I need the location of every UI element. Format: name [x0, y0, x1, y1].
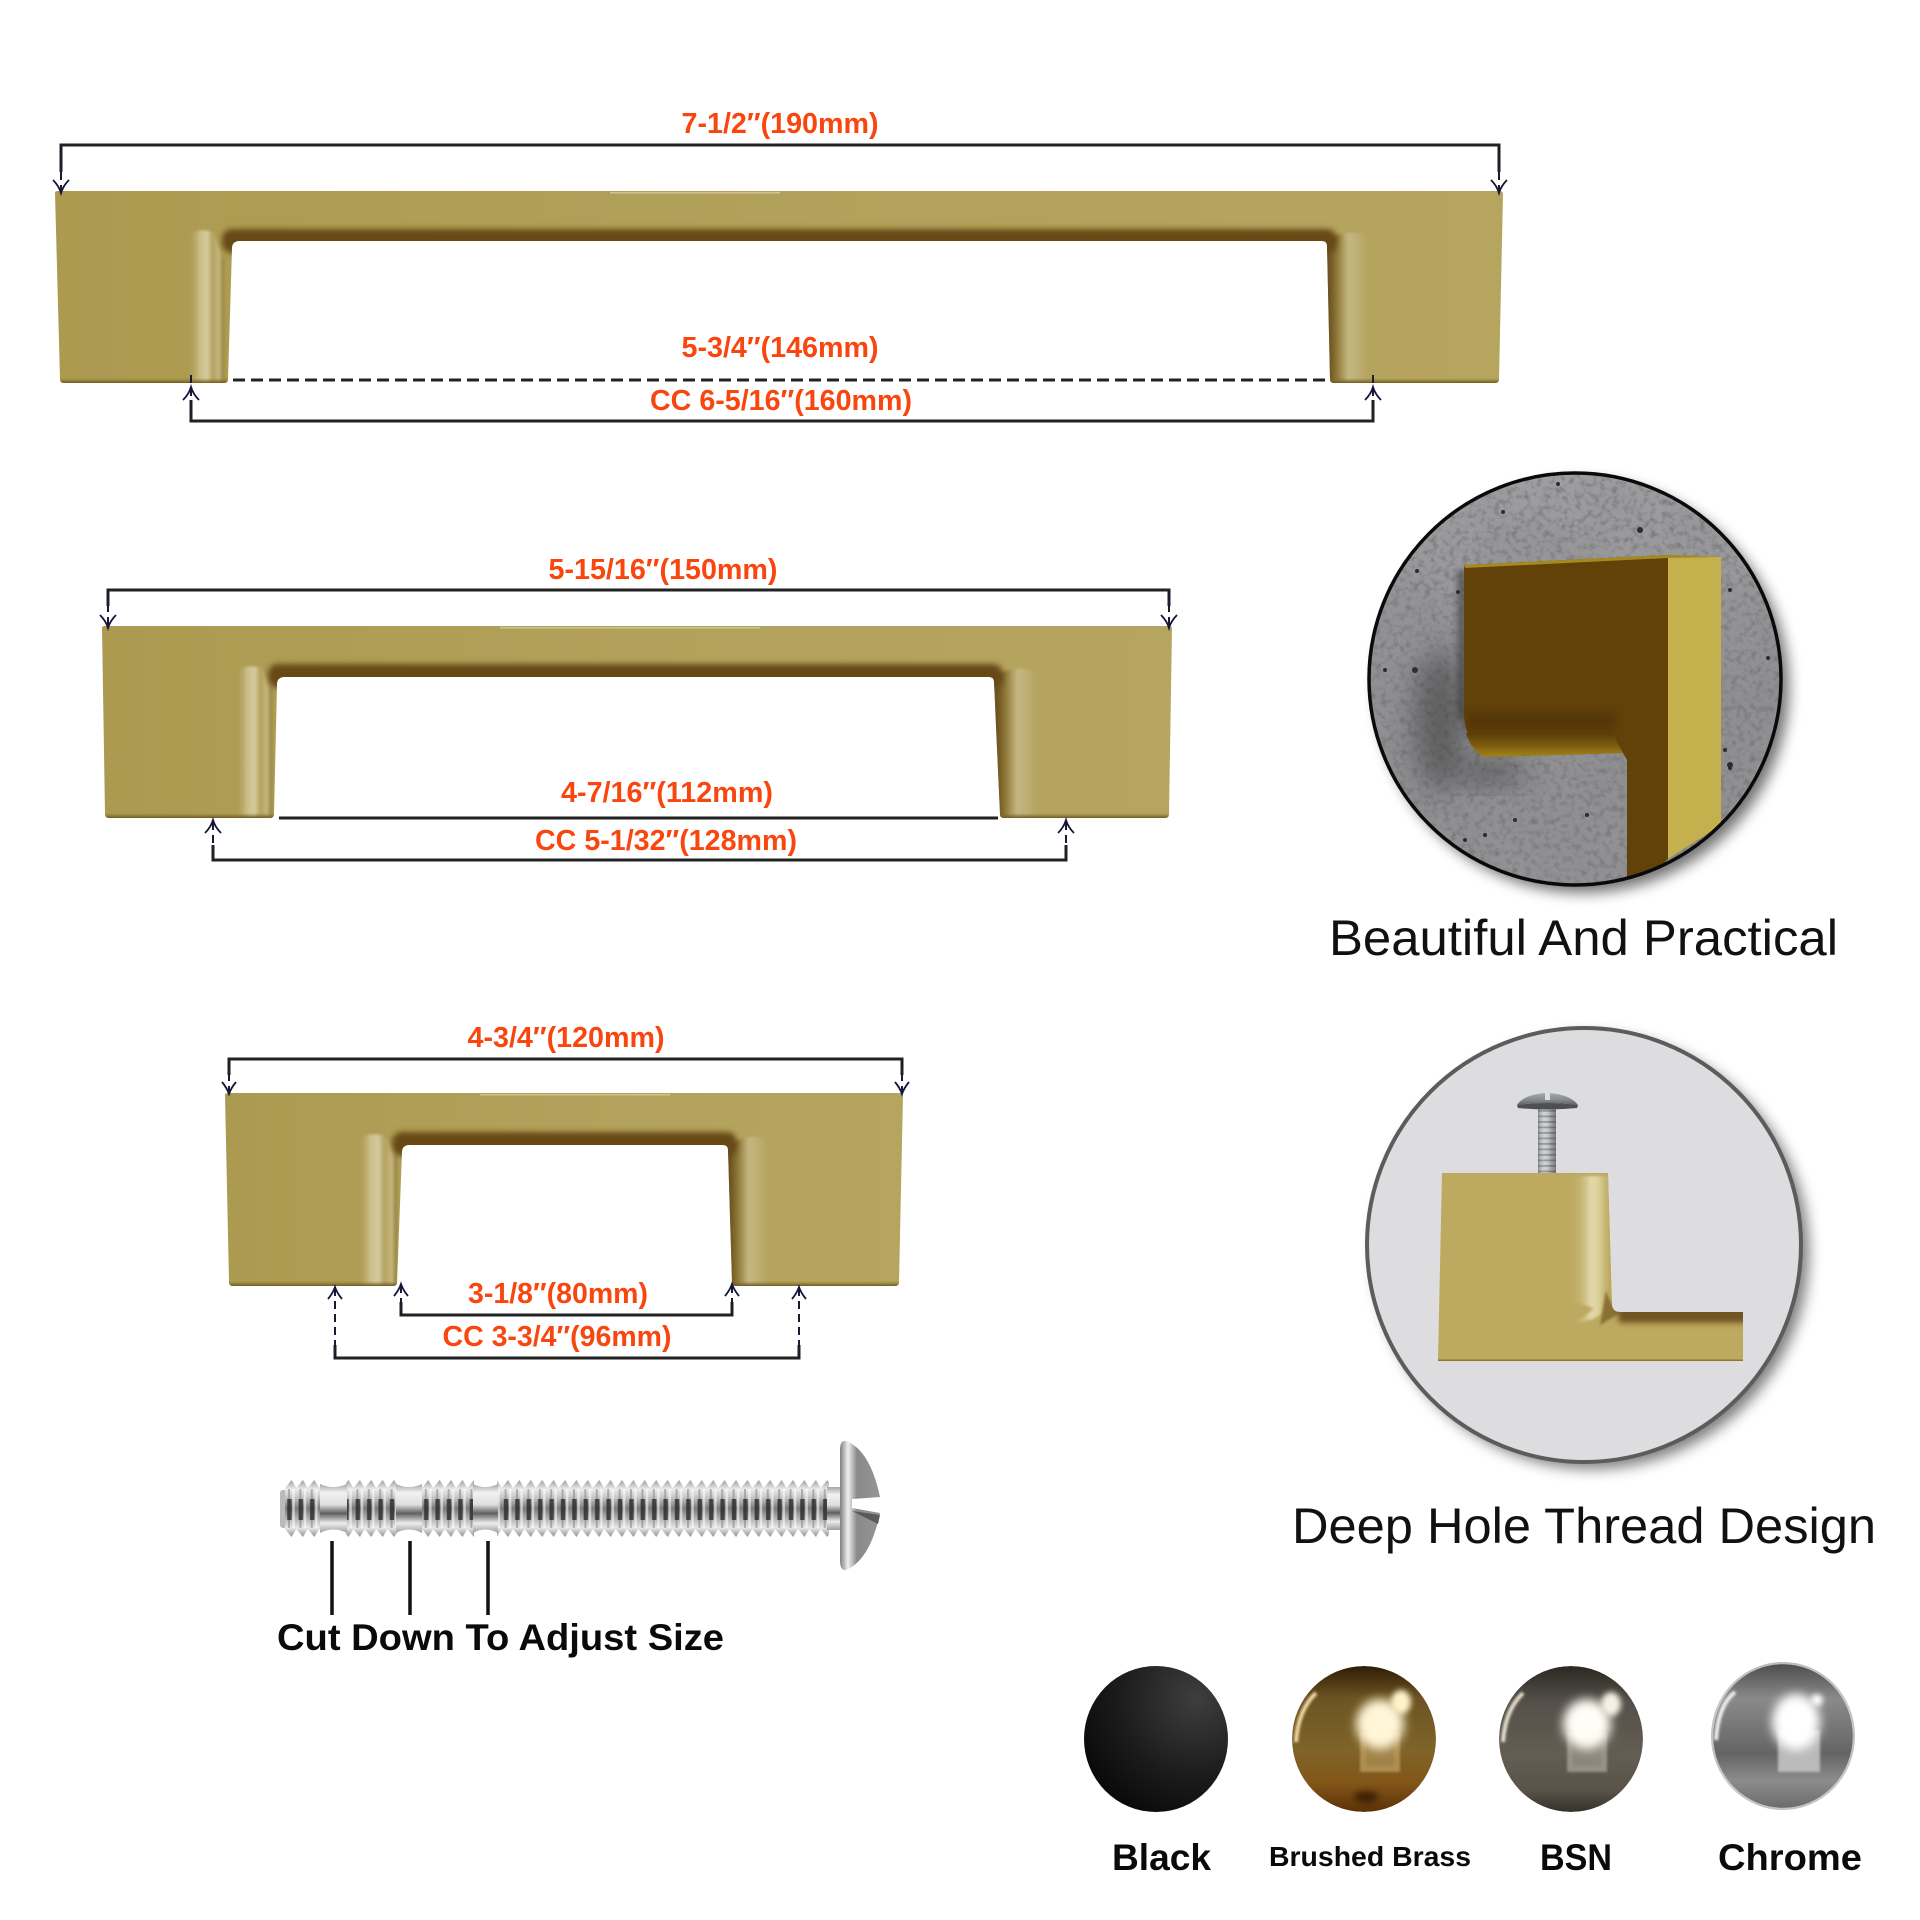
- large handle body: [55, 191, 1505, 390]
- circle outline: [1369, 473, 1781, 885]
- overall width dimension: [53, 108, 1507, 193]
- screw with cut points: [277, 1441, 880, 1658]
- overall width dimension: 4-3/4″(120mm): [468, 1022, 664, 1054]
- screw shaft: [280, 1478, 841, 1539]
- finish swatches: [1084, 1662, 1862, 1878]
- swatch: brushed brass: Brushed Brass: [1269, 1841, 1471, 1872]
- medium handle with dimensions: [100, 554, 1177, 860]
- handle end cross section: [1438, 1173, 1753, 1361]
- medium handle body: [100, 626, 1175, 825]
- cut caption: Cut Down To Adjust Size: [277, 1617, 724, 1658]
- heading: Beautiful And Practical: [1329, 910, 1838, 966]
- large handle with dimensions: [53, 108, 1507, 421]
- swatch: chrome: Chrome: [1718, 1837, 1862, 1878]
- overall width dimension: [222, 1022, 909, 1094]
- heading: Deep Hole Thread Design: [1292, 1498, 1876, 1554]
- inner width dimension: 3-1/8″(80mm): [468, 1278, 648, 1310]
- center to center dimension: CC 5-1/32″(128mm): [535, 825, 797, 857]
- cut markers: [332, 1541, 488, 1615]
- center to center dimension: [183, 375, 1381, 421]
- overall width dimension: 7-1/2″(190mm): [682, 108, 878, 140]
- inner width dimension: [394, 1278, 739, 1315]
- center to center dimension: CC 3-3/4″(96mm): [442, 1321, 672, 1353]
- overall width dimension: [100, 554, 1177, 628]
- swatch: chrome: [1711, 1662, 1862, 1878]
- overall width dimension: 5-15/16″(150mm): [548, 554, 778, 586]
- panel: beautiful and practical: [1329, 465, 1838, 966]
- swatch: black: Black: [1112, 1837, 1211, 1878]
- inner width dimension: 5-3/4″(146mm): [682, 332, 878, 364]
- grey disc: [1367, 1028, 1801, 1462]
- swatch: bsn: BSN: [1540, 1837, 1612, 1878]
- small handle body: [225, 1093, 905, 1292]
- swatch: bsn: [1499, 1666, 1643, 1878]
- mounting screw: [1517, 1093, 1578, 1173]
- screw head: [840, 1441, 880, 1570]
- circle shadow: [1377, 481, 1789, 893]
- concrete wall photo with handle end: [1370, 474, 1780, 884]
- center to center dimension: [328, 1287, 806, 1358]
- swatch: brushed brass: [1269, 1666, 1471, 1872]
- small handle with dimensions: [222, 1022, 909, 1358]
- center to center dimension: [205, 820, 1074, 860]
- swatch: black: [1084, 1666, 1228, 1878]
- inner width dimension: 4-7/16″(112mm): [561, 777, 773, 809]
- center to center dimension: CC 6-5/16″(160mm): [650, 385, 912, 417]
- panel: deep hole thread design: [1292, 1028, 1876, 1554]
- circle shadow: [1375, 1035, 1809, 1469]
